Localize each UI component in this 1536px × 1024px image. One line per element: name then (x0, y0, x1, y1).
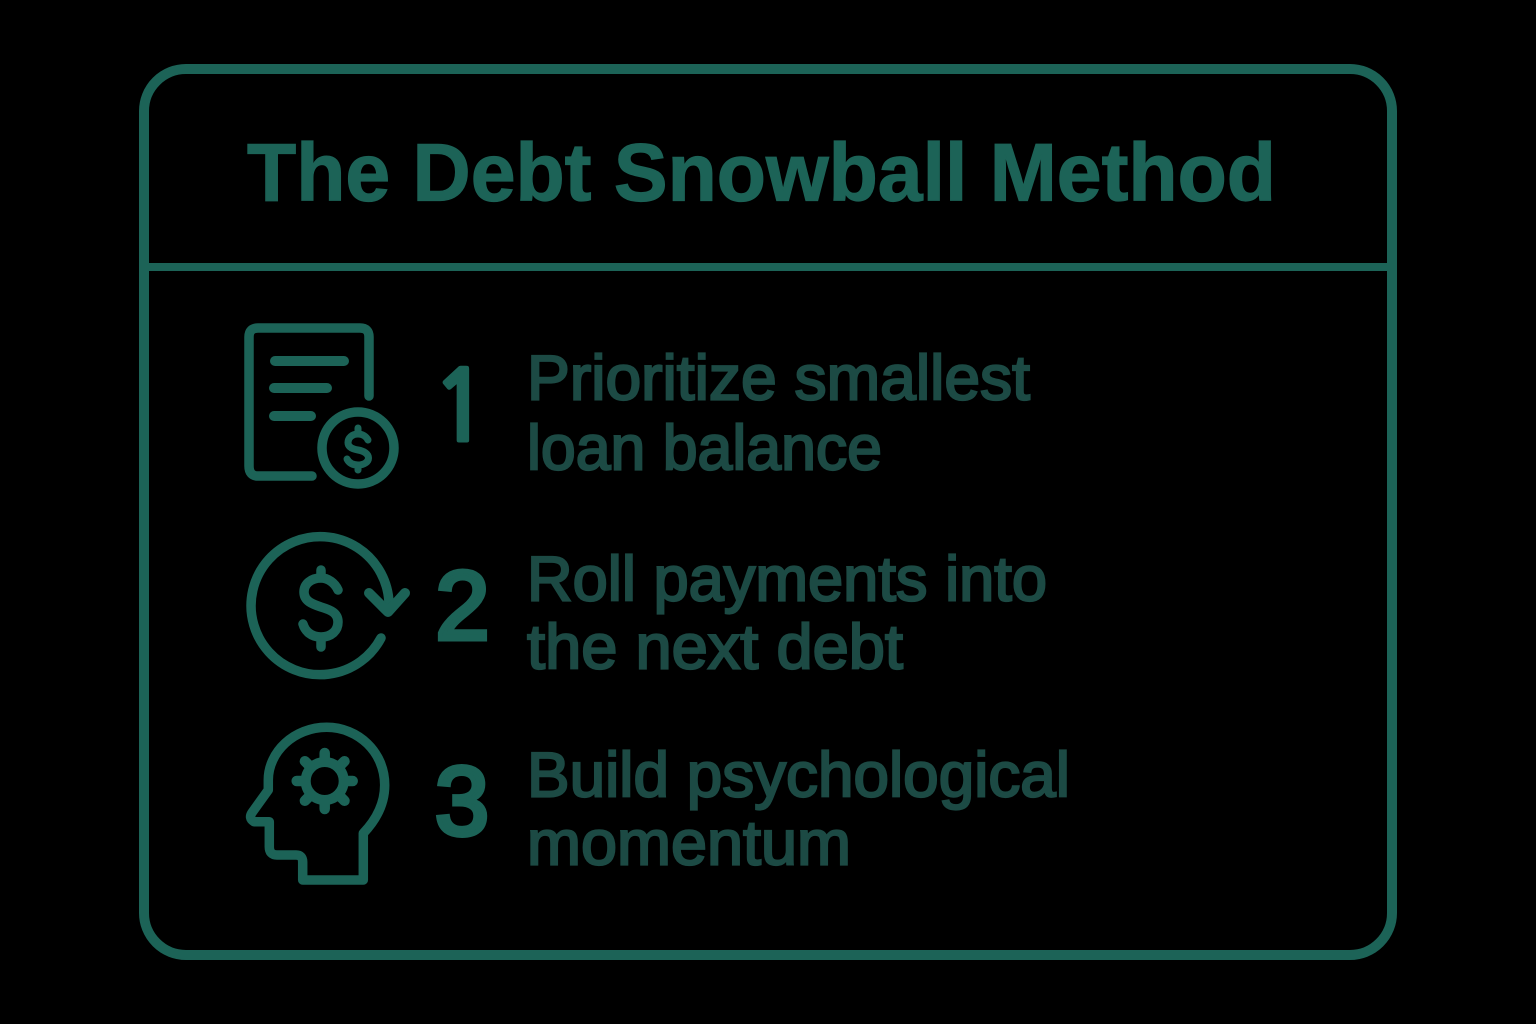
title: The Debt Snowball Method (247, 128, 1276, 218)
step 3 text (527, 740, 1070, 878)
step 3 text: momentum (527, 808, 851, 878)
step 2 text (527, 544, 1047, 682)
icon: circular arrow with dollar (251, 537, 405, 675)
step 1 text (527, 344, 1030, 484)
icon: head with gear (251, 727, 385, 880)
step number 3: 3 (435, 746, 489, 856)
step 2 text: Roll payments into (527, 544, 1047, 614)
panel: outer rounded frame (144, 69, 1392, 955)
step 2 text: the next debt (527, 612, 904, 682)
step number 2: 2 (436, 551, 489, 660)
step 1 text: loan balance (527, 414, 882, 484)
icon: document with dollar coin (249, 328, 394, 484)
step number 1: 1 (431, 359, 490, 456)
step 3 text: Build psychological (527, 740, 1070, 810)
step 1 text: Prioritize smallest (527, 344, 1030, 414)
